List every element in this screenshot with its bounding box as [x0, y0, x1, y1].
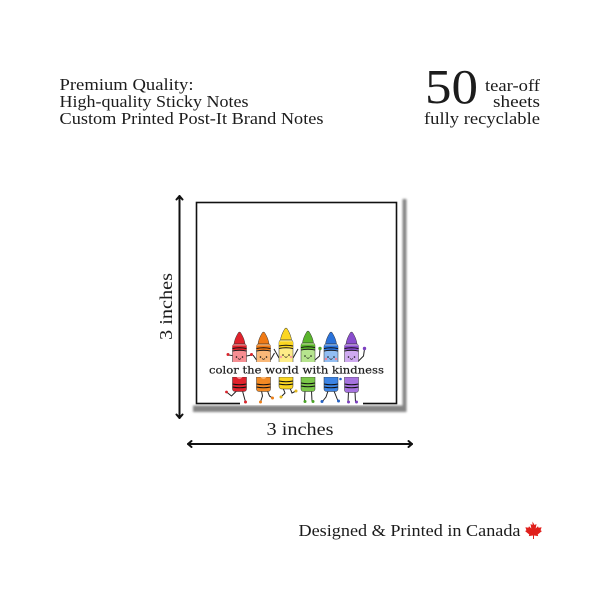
arrow: vertical dimension	[176, 196, 182, 418]
sticky note shadow	[193, 199, 406, 412]
crayon illustration	[205, 328, 389, 405]
crayon: blue	[320, 332, 342, 403]
crayon: yellow	[274, 328, 298, 398]
bottom border gap	[240, 399, 363, 405]
label: vertical 3 inches: 3 inches	[156, 273, 176, 340]
text: designed and printed in Canada: Designed & Printed in Canada	[298, 521, 521, 540]
crayon: red	[225, 332, 253, 404]
text block: 50 tear-off sheets, fully recyclable: tear-off	[485, 76, 540, 95]
text block: 50 tear-off sheets, fully recyclable: fully recyclable	[424, 109, 540, 128]
text block: premium quality features: High-quality Sticky Notes	[60, 92, 248, 111]
crayon: green	[301, 331, 322, 403]
slogan strip: color the world with kindness	[209, 364, 384, 376]
text block: 50 tear-off sheets, fully recyclable: sheets	[493, 92, 540, 111]
label: horizontal 3 inches: 3 inches	[266, 419, 334, 439]
icon: maple leaf	[525, 522, 542, 539]
arrow: horizontal dimension	[188, 441, 412, 447]
crayon: orange	[253, 332, 274, 404]
text block: 50 tear-off sheets, fully recyclable: 50	[425, 59, 478, 114]
text block: 50 tear-off sheets, fully recyclable	[424, 59, 540, 128]
sticky note	[196, 202, 396, 405]
text block: premium quality features: Premium Quality:	[60, 75, 194, 94]
crayon: purple	[344, 332, 366, 404]
text block: premium quality features	[60, 75, 324, 128]
slogan strip	[205, 362, 389, 377]
text block: premium quality features: Custom Printed Post-It Brand Notes	[60, 109, 324, 128]
